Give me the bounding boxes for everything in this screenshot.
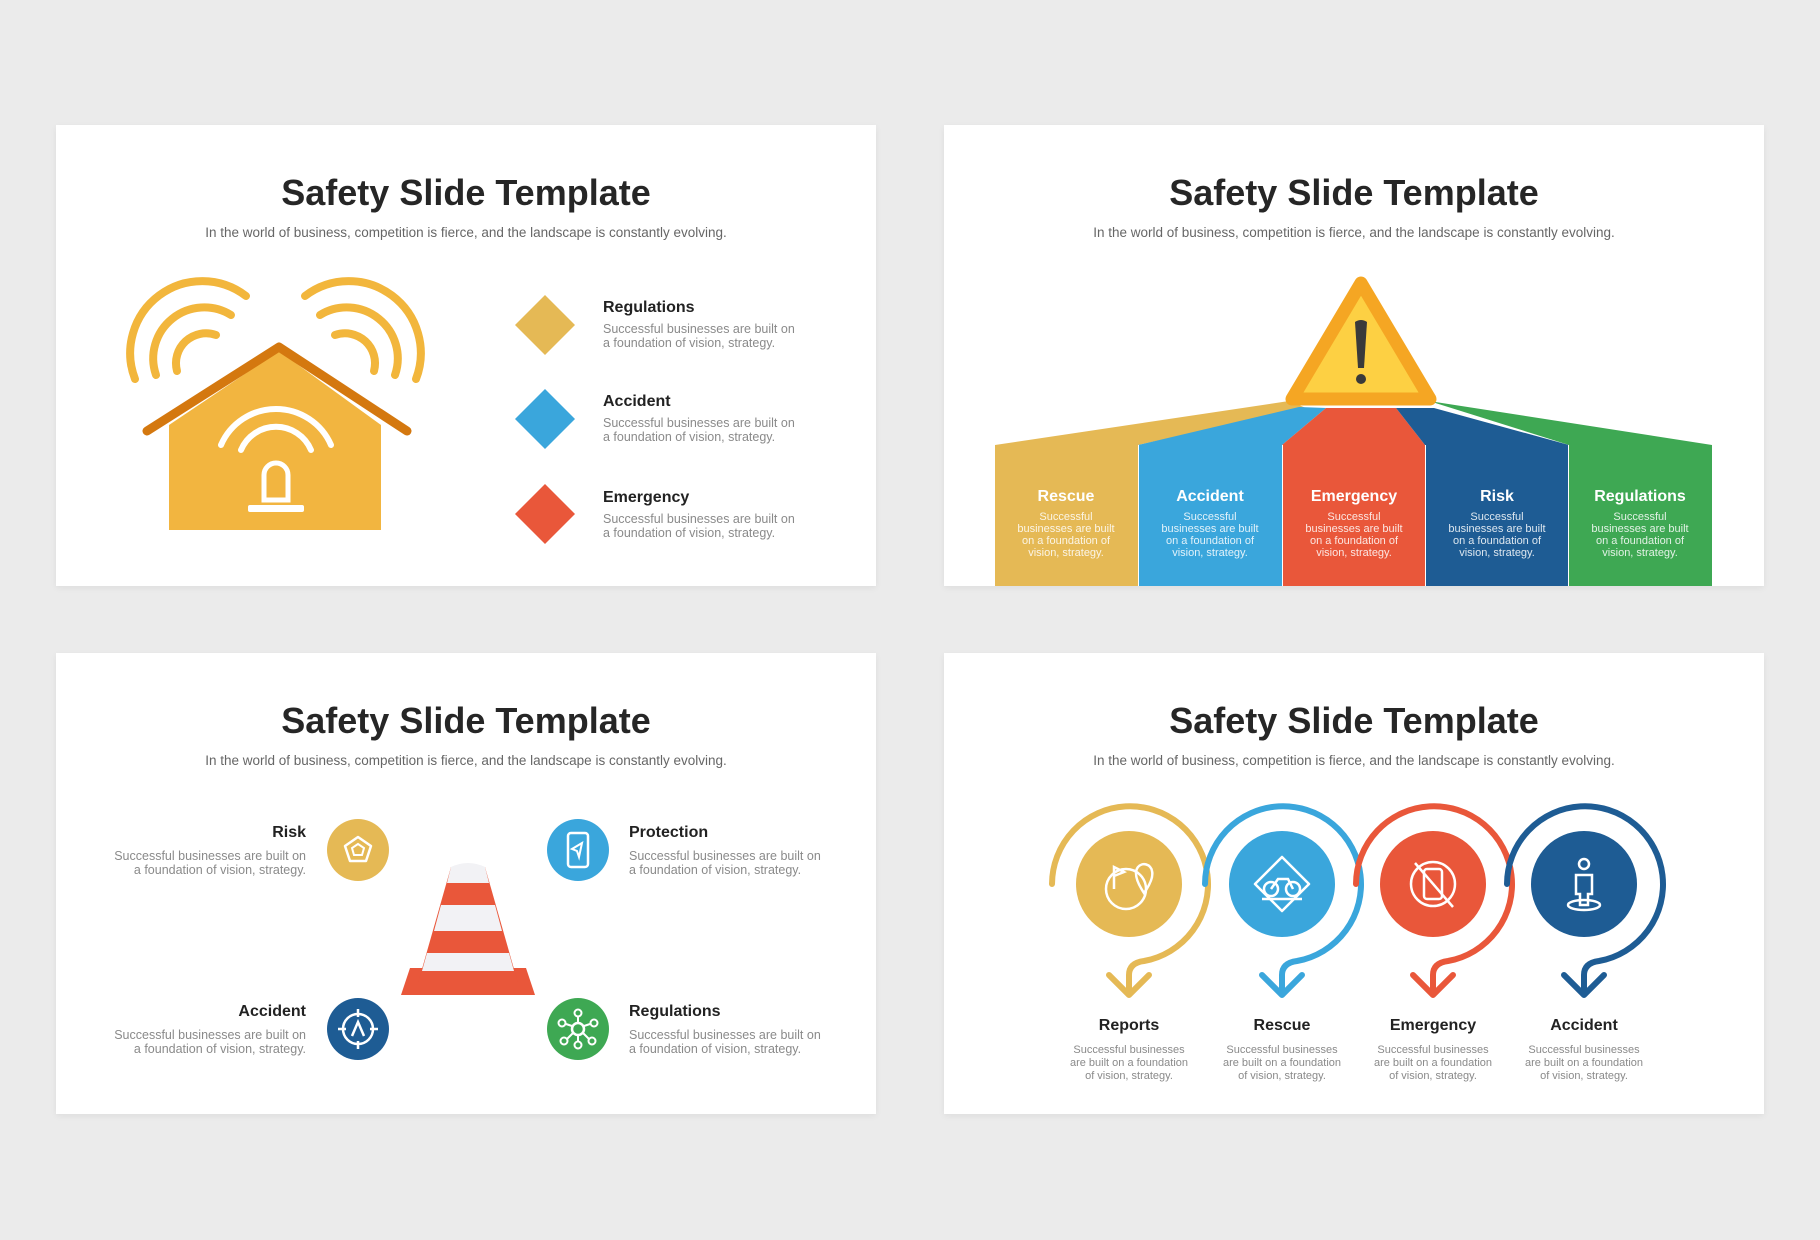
subtitle: In the world of business, competition is fierce, and the landscape is constantly evolving.: [205, 753, 727, 768]
item: accident: Accident: [603, 393, 671, 410]
column: risk: Successful: [1470, 511, 1524, 523]
item: regulations: [547, 998, 821, 1060]
column: accident: businesses are built: [1161, 523, 1259, 535]
column: risk: [1426, 445, 1568, 586]
item: emergency: Emergency: [603, 489, 689, 506]
step: rescue: Rescue: [1254, 1017, 1311, 1034]
step: emergency: Emergency: [1390, 1017, 1476, 1034]
item: emergency: a foundation of vision, strategy.: [603, 526, 775, 540]
chart: fans: [995, 401, 1712, 445]
item: risk: a foundation of vision, strategy.: [134, 863, 306, 877]
item: protection: Successful businesses are built on: [629, 849, 821, 863]
column: regulations: [1569, 445, 1712, 586]
step: accident: Accident: [1550, 1017, 1618, 1034]
step: emergency: Successful businesses: [1377, 1044, 1489, 1056]
item: accident: Accident: [238, 1003, 307, 1020]
title: Safety Slide Template: [281, 700, 651, 741]
column: risk: on a foundation of: [1453, 535, 1542, 547]
column: rescue: vision, strategy.: [1028, 547, 1104, 559]
item: regulations: Regulations: [603, 299, 695, 316]
column: risk: Risk: [1480, 488, 1514, 505]
item: regulations: [515, 295, 795, 355]
column: emergency: Emergency: [1311, 488, 1397, 505]
column: emergency: [1283, 445, 1425, 586]
column: regulations: Regulations: [1594, 488, 1686, 505]
step: emergency: [1356, 806, 1512, 1082]
column: rescue: businesses are built: [1017, 523, 1115, 535]
column: rescue: Rescue: [1038, 488, 1095, 505]
item: emergency: Successful businesses are built on: [603, 512, 795, 526]
step: emergency: are built on a foundation: [1374, 1057, 1492, 1069]
item: accident: a foundation of vision, strategy.: [134, 1042, 306, 1056]
column: regulations: Successful: [1613, 511, 1667, 523]
column: rescue: [995, 445, 1138, 586]
column: accident: [1139, 445, 1282, 586]
item: regulations: Regulations: [629, 1003, 721, 1020]
icon: house alarm: [130, 281, 421, 530]
column: risk: vision, strategy.: [1459, 547, 1535, 559]
step: reports: are built on a foundation: [1070, 1057, 1188, 1069]
item: regulations: Successful businesses are built on: [629, 1028, 821, 1042]
subtitle: In the world of business, competition is fierce, and the landscape is constantly evolving.: [205, 225, 727, 240]
column: emergency: vision, strategy.: [1316, 547, 1392, 559]
title: Safety Slide Template: [1169, 700, 1539, 741]
column: accident: on a foundation of: [1166, 535, 1255, 547]
title: Safety Slide Template: [281, 172, 651, 213]
title: Safety Slide Template: [1169, 172, 1539, 213]
step: accident: are built on a foundation: [1525, 1057, 1643, 1069]
item: protection: Protection: [629, 824, 708, 841]
step: reports: Reports: [1099, 1017, 1159, 1034]
item: accident: Successful businesses are built on: [603, 416, 795, 430]
item: risk: [114, 819, 389, 881]
item: accident: [114, 998, 389, 1060]
step: reports: of vision, strategy.: [1085, 1070, 1173, 1082]
item: accident: a foundation of vision, strategy.: [603, 430, 775, 444]
step: accident: [1507, 806, 1663, 1082]
item: protection: [547, 819, 821, 881]
step: emergency: of vision, strategy.: [1389, 1070, 1477, 1082]
column: regulations: on a foundation of: [1596, 535, 1685, 547]
item: emergency: [515, 484, 795, 544]
item: protection: a foundation of vision, strategy.: [629, 863, 801, 877]
column: emergency: businesses are built: [1305, 523, 1403, 535]
panel: circular steps: [944, 653, 1764, 1114]
item: accident: Successful businesses are built on: [114, 1028, 306, 1042]
column: accident: vision, strategy.: [1172, 547, 1248, 559]
column: accident: Successful: [1183, 511, 1237, 523]
icon: warning triangle: [1292, 283, 1430, 399]
column: accident: Accident: [1176, 488, 1244, 505]
item: regulations: Successful businesses are built on: [603, 322, 795, 336]
item: accident: [515, 389, 795, 449]
step: reports: Successful businesses: [1073, 1044, 1185, 1056]
icon: traffic cone: [401, 863, 535, 995]
step: accident: Successful businesses: [1528, 1044, 1640, 1056]
column: rescue: on a foundation of: [1022, 535, 1111, 547]
panel: warning columns: [944, 125, 1764, 586]
item: regulations: a foundation of vision, strategy.: [629, 1042, 801, 1056]
column: risk: businesses are built: [1448, 523, 1546, 535]
column: emergency: on a foundation of: [1310, 535, 1399, 547]
subtitle: In the world of business, competition is fierce, and the landscape is constantly evolving.: [1093, 753, 1615, 768]
subtitle: In the world of business, competition is fierce, and the landscape is constantly evolving.: [1093, 225, 1615, 240]
item: risk: Successful businesses are built on: [114, 849, 306, 863]
step: accident: of vision, strategy.: [1540, 1070, 1628, 1082]
step: rescue: [1205, 806, 1361, 1082]
item: risk: Risk: [272, 824, 306, 841]
column: regulations: vision, strategy.: [1602, 547, 1678, 559]
column: regulations: businesses are built: [1591, 523, 1689, 535]
step: reports: [1052, 806, 1208, 1082]
step: rescue: of vision, strategy.: [1238, 1070, 1326, 1082]
step: rescue: Successful businesses: [1226, 1044, 1338, 1056]
step: rescue: are built on a foundation: [1223, 1057, 1341, 1069]
column: emergency: Successful: [1327, 511, 1381, 523]
item: regulations: a foundation of vision, strategy.: [603, 336, 775, 350]
panel: house alarm: [56, 125, 876, 586]
column: rescue: Successful: [1039, 511, 1093, 523]
panel: traffic cone: [56, 653, 876, 1114]
